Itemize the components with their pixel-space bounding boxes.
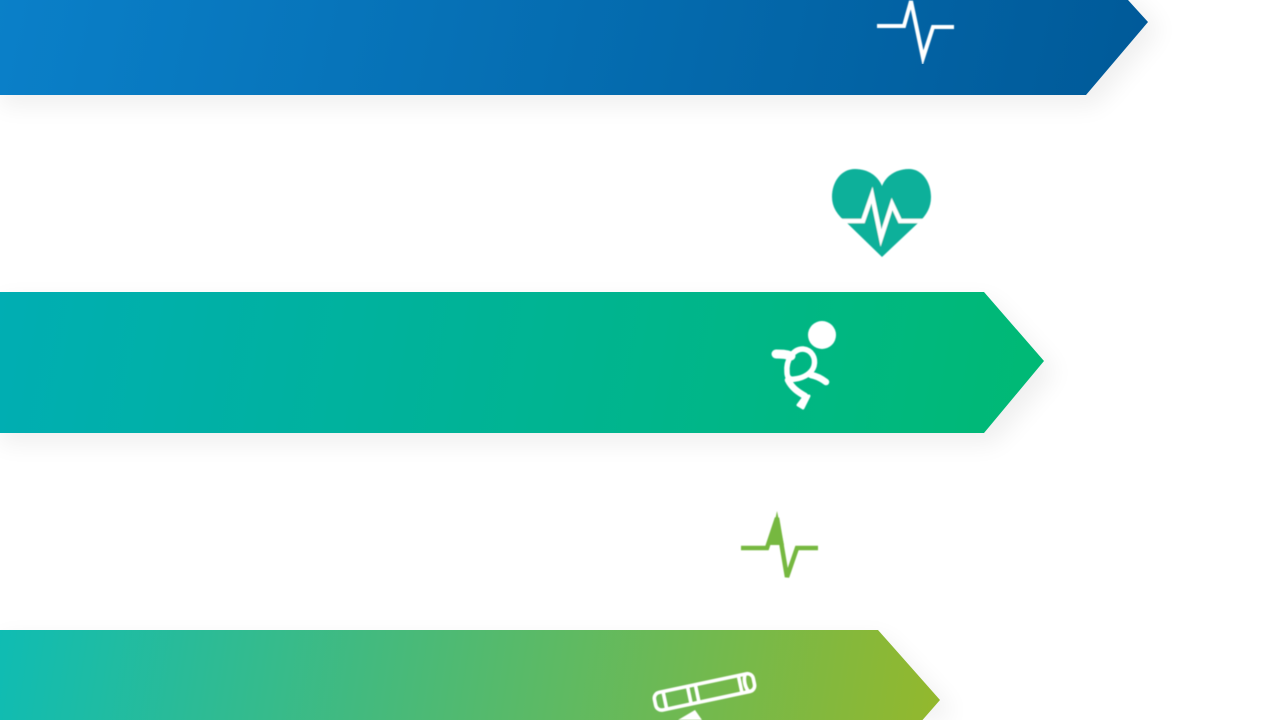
arrow band: blue bbox=[0, 0, 1160, 106]
icon: white turtle on teal band bbox=[776, 321, 836, 408]
arrow band: green bbox=[0, 630, 952, 720]
icon: white pulse on blue band bbox=[877, 1, 954, 58]
arrow band: teal bbox=[0, 292, 1056, 444]
icon: teal heart with pulse bbox=[832, 169, 931, 257]
icon: green pulse bbox=[741, 511, 818, 577]
icon: white telescope on green band bbox=[653, 672, 756, 720]
